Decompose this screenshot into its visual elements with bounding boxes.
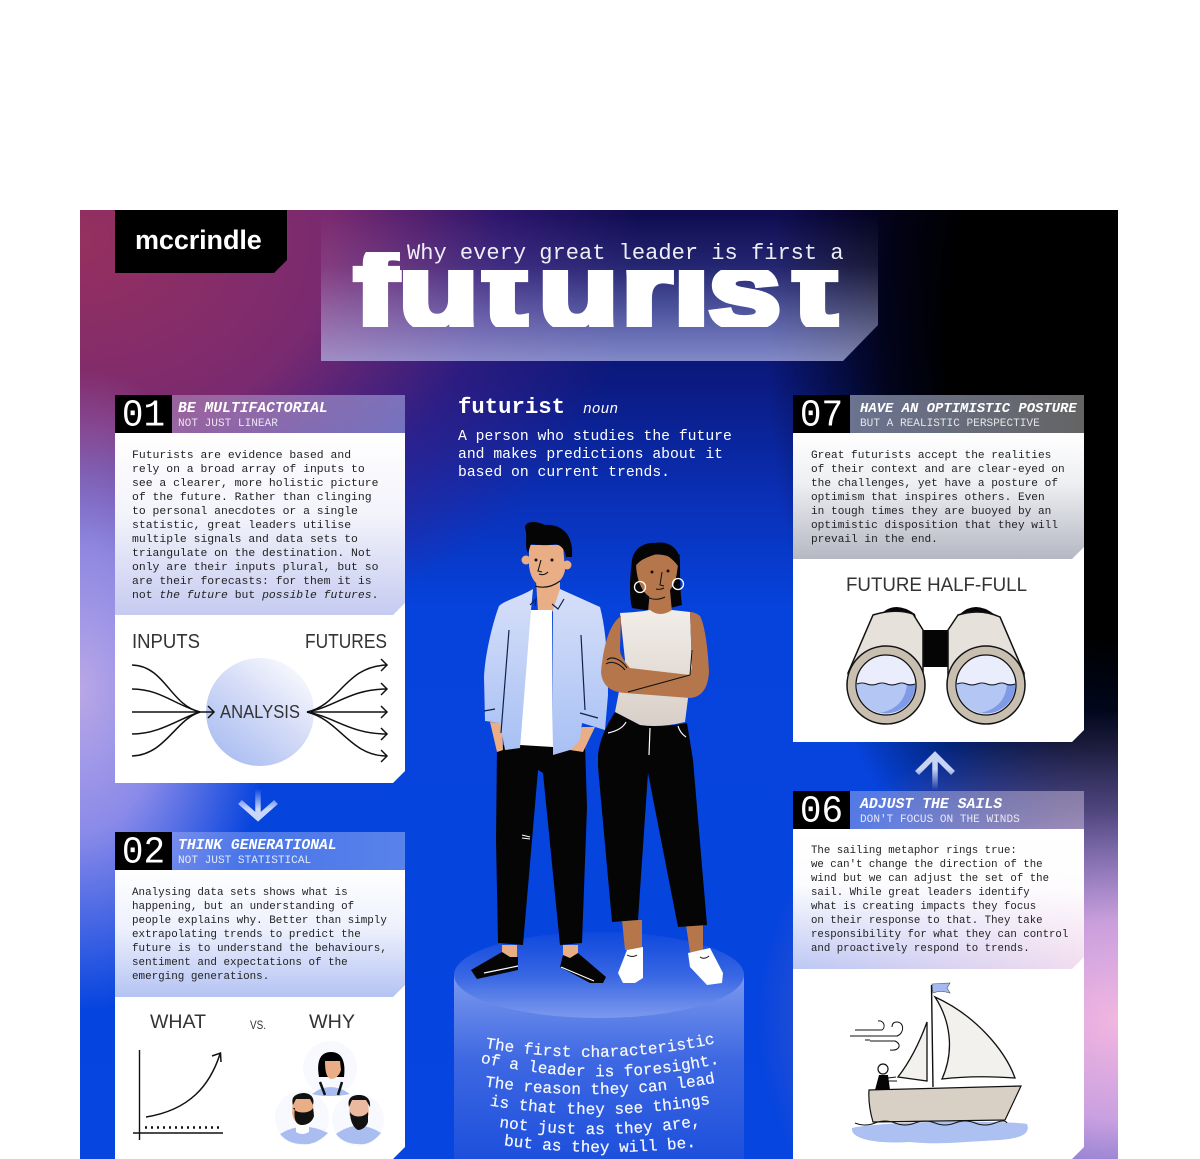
title banner background [321,232,878,361]
definition: futurist noun [458,394,732,481]
heading 02: THINK GENERATIONAL [178,838,337,854]
heading 02: NOT JUST STATISTICAL [178,855,311,867]
heading 07: BUT A REALISTIC PERSPECTIVE [860,418,1040,430]
diagram: what vs why: WHAT [150,1012,206,1033]
icon: three people [275,1041,384,1146]
definition heading: futurist noun [458,394,618,420]
white card [793,957,1084,1159]
heading 01: BE MULTIFACTORIAL [178,401,328,417]
illustration: podium and two figures [454,522,744,1159]
diagram: what vs why: VS. [250,1018,266,1032]
figure: man [471,522,608,983]
podium text: but as they will be. [504,1134,692,1156]
diagram: inputs analysis futures [132,631,388,766]
text block 01: Futurists are evidence based and rely on a broad array of inputs to see a clearer, more holistic picture of the future. Rather than clinging to personal anecdotes or a single statistic, great leaders utilise multiple signals and data sets to triangulate on the destination. Not only are their inputs plural, but so are their forecasts: for them it is not the future but possible futures. [132,449,378,602]
panel 02: think generational [115,832,405,1159]
text block 02: Analysing data sets shows what is happening, but an understanding of people explains why. Better than simply extrapolating trends to predict the future is to understand the behaviours, sentiment and expectations of the emerging generations. [132,887,387,983]
figure: woman [598,543,723,985]
heading 07 [850,395,1084,433]
illustration: sailboat [850,982,1028,1144]
heading 06 [850,791,1084,829]
white card [793,547,1084,742]
podium text [482,1034,716,1156]
podium text: not just as they are, [500,1118,697,1136]
diagram: inputs analysis futures: INPUTS [132,631,200,653]
definition text: A person who studies the future and makes predictions about it based on current trends. [458,429,732,481]
diagram: inputs analysis futures: ANALYSIS [220,701,300,722]
podium [454,932,744,1159]
podium text: is that they see things [490,1094,709,1118]
diagram: future half-full binoculars: FUTURE HALF-FULL [846,575,1027,596]
arrow: up to 07 [915,751,955,789]
diagram: what vs why: WHY [309,1012,355,1033]
title word: futurist: futurist [354,227,837,351]
text block 06: The sailing metaphor rings true: we can't change the direction of the wind but we can adjust the set of the sail. While great leaders identify what is creating impacts they focus on their response to that. They take responsibility for what they can control and proactively respond to trends. [811,845,1068,955]
heading 07: HAVE AN OPTIMISTIC POSTURE [860,401,1077,417]
title line: Why every great leader is first a [407,241,844,266]
panel 01: be multifactorial [115,395,405,783]
background gradient [80,210,1118,1159]
text block 07: Great futurists accept the realities of their context and are clear-eyed on the challenges, yet have a posture of optimism that inspires others. Even in tough times they are buoyed by an optimistic disposition that they will prevail in the end. [811,450,1065,546]
podium text: of a leader is foresight. [482,1054,716,1076]
white card [115,603,405,783]
heading 01 [172,395,405,433]
title banner [321,232,878,361]
logo: mccrindle: mccrindle [135,225,262,255]
chart: rising curve [133,1050,223,1140]
logo: mccrindle [115,210,287,273]
white card [115,985,405,1159]
podium text: The first characteristic [487,1034,714,1058]
arrow: down to 02 [238,790,278,822]
heading 01: NOT JUST LINEAR [178,418,278,430]
heading 06: ADJUST THE SAILS [860,797,1002,813]
diagram: future half-full binoculars [846,575,1027,725]
diagram: what vs why [133,1012,381,1144]
panel 07: optimistic posture [793,395,1084,742]
heading 02 [172,832,405,870]
panel 06: adjust the sails [793,791,1084,1159]
diagram: inputs analysis futures: FUTURES [305,631,387,653]
heading 06: DON'T FOCUS ON THE WINDS [860,814,1020,826]
podium text: The reason they can lead [486,1072,714,1097]
